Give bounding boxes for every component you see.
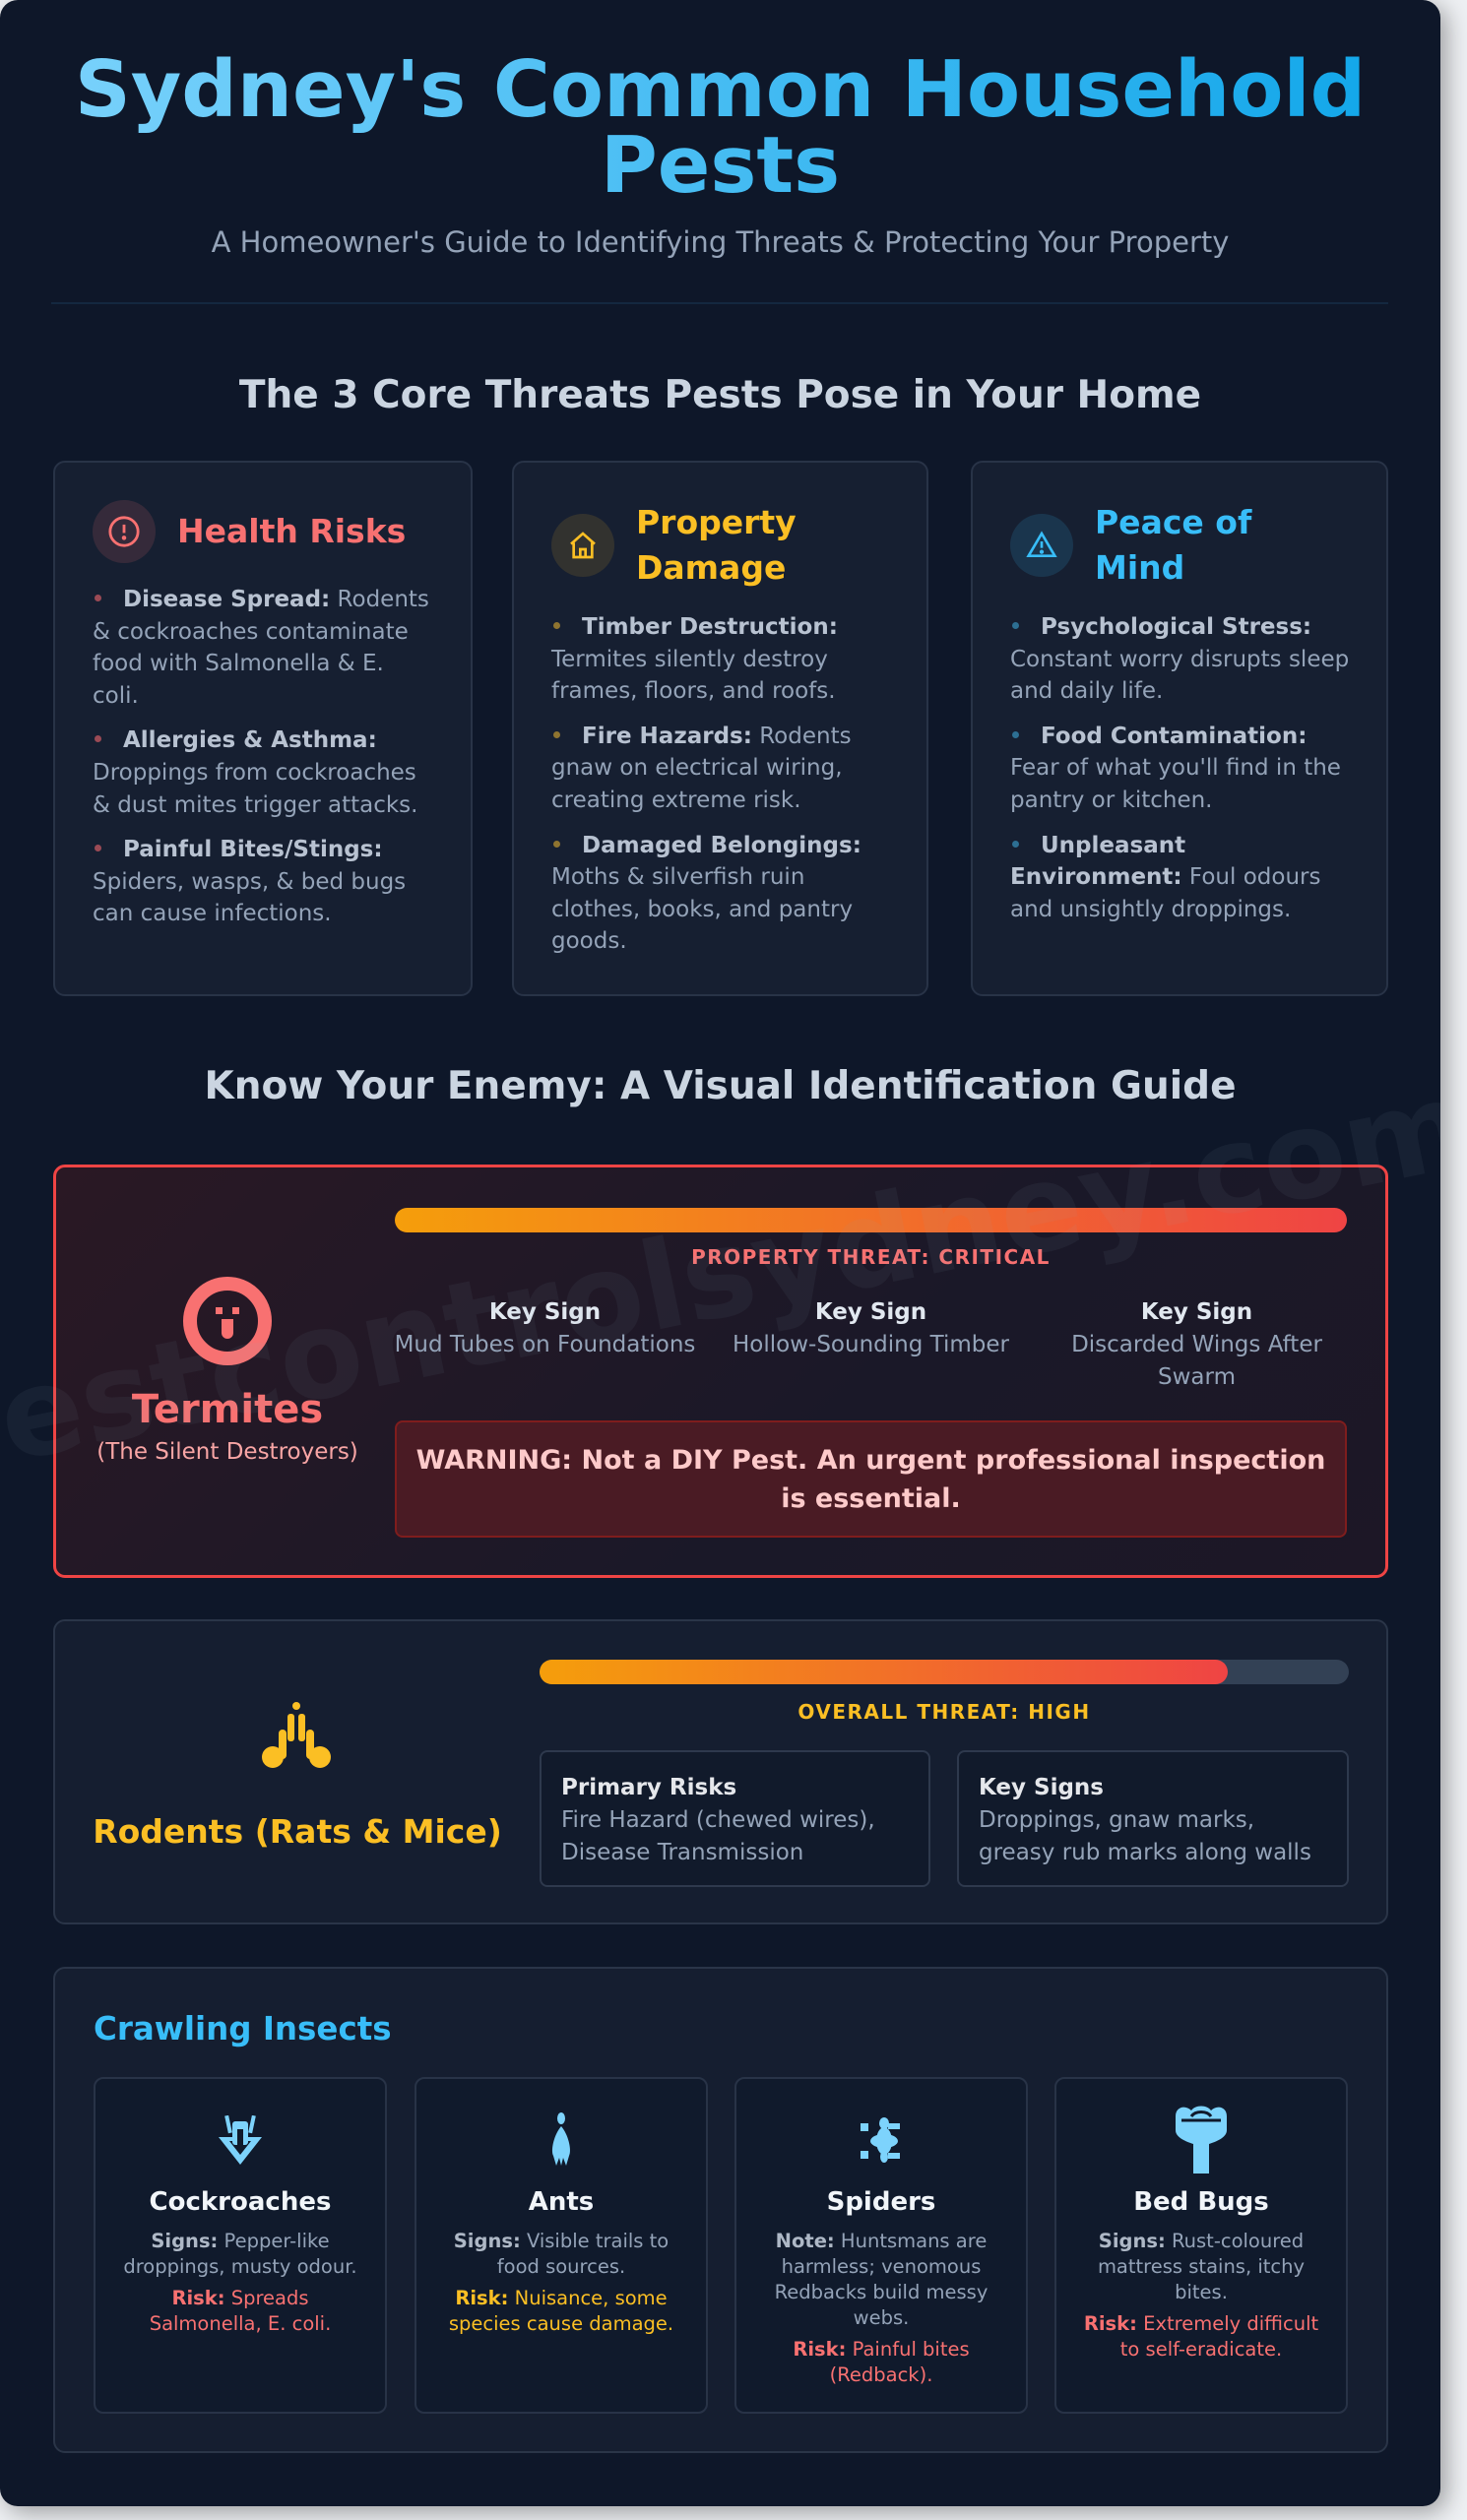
list: peace: Food Contamination: Fear of what you'll find in the pantry or kitchen. — [1010, 724, 1341, 813]
threat bar: high — [540, 1660, 1349, 1684]
card: ants: Ants — [529, 2187, 594, 2217]
warning box: WARNING: Not a DIY Pest. An urgent professional inspection is essential. — [416, 1445, 1325, 1514]
card: cockroaches — [94, 2077, 387, 2414]
box: key signs: Key Signs — [979, 1775, 1104, 1800]
panel: property damage — [512, 461, 928, 996]
list: property: Damaged Belongings: Moths & silverfish ruin clothes, books, and pantry goods. — [551, 833, 861, 954]
card: spiders: Risk: Painful bites (Redback). — [793, 2338, 970, 2386]
panel: rodents — [53, 1619, 1388, 1924]
card: bed bugs — [1054, 2077, 1348, 2414]
title — [0, 52, 1440, 204]
card: spiders — [734, 2077, 1028, 2414]
box: key signs: Droppings, gnaw marks, greasy rub marks along walls — [979, 1807, 1311, 1865]
key signs: Hollow-Sounding Timber — [733, 1332, 1009, 1357]
key signs: Key Sign — [1141, 1299, 1252, 1325]
title: Pests — [601, 120, 840, 211]
panel: peace of mind — [971, 461, 1388, 996]
list: health — [93, 587, 429, 926]
list: health: Painful Bites/Stings: Spiders, wasps, & bed bugs can cause infections. — [93, 837, 406, 926]
box: primary risks: Fire Hazard (chewed wires), Disease Transmission — [561, 1807, 875, 1865]
icon: cockroach — [219, 2115, 262, 2165]
subtitle: A Homeowner's Guide to Identifying Threats & Protecting Your Property — [212, 225, 1229, 259]
card: cockroaches: Signs: Pepper-like droppings, musty odour. — [123, 2230, 357, 2278]
termites identity: (The Silent Destroyers) — [96, 1439, 358, 1465]
key signs — [395, 1299, 1322, 1390]
header: peace — [1010, 503, 1252, 587]
header: peace: Mind — [1095, 548, 1184, 587]
heading: crawling insects: Crawling Insects — [94, 2010, 392, 2048]
threat label: OVERALL THREAT: HIGH — [797, 1700, 1091, 1724]
list: peace: Unpleasant Environment: Foul odours and unsightly droppings. — [1010, 833, 1320, 922]
header: peace: Peace of — [1095, 503, 1251, 541]
card: bed bugs: Risk: Extremely difficult to self-eradicate. — [1084, 2312, 1318, 2361]
list: peace — [1010, 614, 1349, 922]
rodent name: Rodents (Rats & Mice) — [93, 1812, 502, 1851]
card: bed bugs: Bed Bugs — [1133, 2187, 1269, 2217]
key signs: Key Sign — [815, 1299, 926, 1325]
heading: know your enemy: Know Your Enemy: A Visual Identification Guide — [204, 1064, 1237, 1108]
list: property — [551, 614, 861, 954]
icon: rodent — [262, 1702, 331, 1768]
list: peace: Psychological Stress: Constant worry disrupts sleep and daily life. — [1010, 614, 1349, 704]
termites identity: Termites — [132, 1387, 323, 1432]
icon: bed bug — [1176, 2107, 1227, 2174]
list: health: Allergies & Asthma: Droppings from cockroaches & dust mites trigger attacks. — [93, 727, 417, 818]
key signs: Key Sign — [489, 1299, 601, 1325]
panel: health risks — [53, 461, 473, 996]
card: bed bugs: Signs: Rust-coloured mattress stains, itchy bites. — [1098, 2230, 1305, 2303]
card: ants — [415, 2077, 708, 2414]
card: ants: Risk: Nuisance, some species cause damage. — [449, 2287, 673, 2335]
header: property: Damage — [636, 548, 786, 587]
heading: core threats: The 3 Core Threats Pests Pose in Your Home — [239, 373, 1201, 417]
icon: termite — [183, 1277, 272, 1365]
icon: spider — [861, 2117, 900, 2163]
panel: termites — [53, 1165, 1388, 1578]
key signs: Mud Tubes on Foundations — [395, 1332, 695, 1357]
title: Sydney's Common Household — [75, 44, 1366, 135]
threat bar: critical — [395, 1208, 1347, 1232]
key signs: Swarm — [1158, 1364, 1236, 1390]
card: cockroaches: Cockroaches — [150, 2187, 331, 2217]
list: property: Fire Hazards: Rodents gnaw on electrical wiring, creating extreme risk. — [551, 724, 852, 813]
list: health: Disease Spread: Rodents & cockroaches contaminate food with Salmonella & E. coli. — [93, 587, 429, 709]
warning box — [395, 1420, 1347, 1538]
card: spiders: Spiders — [827, 2187, 935, 2217]
card: cockroaches: Risk: Spreads Salmonella, E. coli. — [150, 2287, 331, 2335]
header: property — [551, 503, 797, 587]
box: key signs — [957, 1750, 1349, 1887]
threat label: PROPERTY THREAT: CRITICAL — [691, 1245, 1051, 1269]
header: property: Property — [636, 503, 797, 541]
header: health risks — [93, 500, 406, 563]
header: health risks: Health Risks — [177, 512, 406, 550]
card: ants: Signs: Visible trails to food sources. — [454, 2230, 669, 2278]
card: spiders: Note: Huntsmans are harmless; venomous Redbacks build messy webs. — [775, 2230, 988, 2329]
box: primary risks: Primary Risks — [561, 1775, 736, 1800]
box: primary risks — [540, 1750, 930, 1887]
panel: crawling insects — [53, 1967, 1388, 2453]
list: property: Timber Destruction: Termites silently destroy frames, floors, and roofs. — [551, 614, 838, 704]
key signs: Discarded Wings After — [1071, 1332, 1322, 1357]
icon: ant — [551, 2112, 570, 2166]
termites identity — [96, 1277, 358, 1465]
